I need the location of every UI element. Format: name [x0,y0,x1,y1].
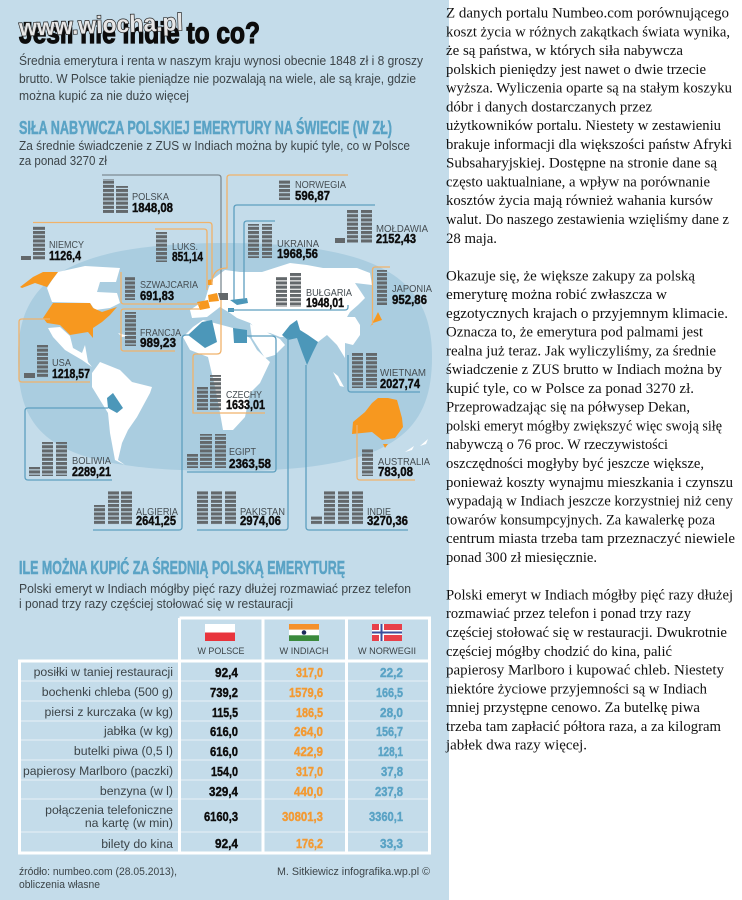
country: Mołdawia: 2152,43 [376,231,416,246]
country: Wietnam: 2027,74 [380,376,421,391]
map subheading: Za średnie świadczenie z ZUS w Indiach można by kupić tyle, co w Polsce [19,139,410,153]
country: Mołdawia: MOŁDAWIA [376,223,428,235]
paragraph 1: Z danych portalu Numbeo.com porównującego [446,6,729,22]
country: Francja [125,312,181,350]
country: Niemcy [21,226,84,263]
values: Norway: 28,0 [380,705,403,720]
paragraph 2: emeryturę można robić zwłaszcza w [446,287,667,303]
country: Luksemburg: 851,14 [172,249,204,264]
paragraph 2: Przeprowadzając się na półwysep Dekan, [446,400,690,416]
paragraph 3: jabłek dwa razy więcej. [445,738,587,754]
country: Polska: POLSKA [132,191,169,203]
paragraph 3: trzeba tam zapłacić półtora raza, a za kilogram [446,719,721,735]
country: Wietnam: WIETNAM [380,367,426,379]
country: Algieria: ALGIERIA [136,506,178,518]
paragraph 1: dóbr i danych dostarczanych przez [446,99,652,115]
values: Poland: 739,2 [210,685,238,700]
country: Egipt: 2363,58 [229,456,271,471]
country: Norwegia: 596,87 [295,188,330,203]
country: Indie: INDIE [367,506,391,518]
values: Poland: 616,0 [210,744,238,759]
row labels: papierosy Marlboro (paczki) [23,764,173,778]
intro text: brutto. W Polsce takie pieniądze nie pozwalają na wiele, ale są kraje, gdzie [19,72,416,86]
values: Poland: 6160,3 [204,809,238,824]
row labels: bochenki chleba (500 g) [42,685,173,699]
paragraph 1: walut. Do naszego zestawienia wzięliśmy dane z [446,212,729,228]
country: USA: USA [52,357,71,369]
flag: India [289,624,319,641]
country: Szwajcaria: SZWAJCARIA [140,279,198,291]
row labels: piersi z kurczaka (w kg) [45,705,173,719]
values: Norway: 33,3 [380,836,403,851]
world map [18,243,432,471]
country: Australia: AUSTRALIA [378,456,430,468]
values: Norway: 128,1 [378,744,403,759]
country: Polska: 1848,08 [132,200,173,215]
country: Japonia [377,270,432,307]
country: Japonia: 952,86 [392,292,427,307]
source note: obliczenia własne [19,879,100,891]
paragraph 1: użytkowników portalu. Niestety w zestawieniu [446,118,721,134]
paragraph 2: ponieważ koszty wynajmu mieszkania i czynszu [446,475,733,491]
country: Pakistan: 2974,06 [240,513,281,528]
paragraph 2: oszczędności mogłyby być jeszcze większe, [446,456,704,472]
row labels: benzyna (w l) [100,784,173,798]
paragraph 2: realna już teraz. Jak wyliczyliśmy, za średnie [446,343,716,359]
country: Francja: 989,23 [140,335,176,350]
values: India: 176,2 [296,836,323,851]
values: Poland: 92,4 [215,836,239,851]
comparison table [20,618,430,853]
country: Ukraina: 1968,56 [277,246,318,261]
country: Pakistan [197,491,285,528]
country: Mołdawia [335,210,428,246]
paragraph 2: świadczenie z ZUS brutto w Indiach można by [446,362,722,378]
paragraph 2: nabywczą o 76 proc. W rzeczywistości [446,437,668,453]
country: USA [24,345,90,381]
paragraph 3: częściej stołować się w restauracji. Dwukrotnie [446,625,727,641]
paragraph 2: towarów konsumpcyjnych. Za kawalerkę poza [446,512,715,528]
paragraph 1: 28 maja. [446,231,497,247]
paragraph 2: Okazuje się, że większe zakupy za polską [446,268,695,284]
country: Indie [311,491,408,528]
values: India: 422,9 [294,744,323,759]
values: Poland: 154,0 [211,764,238,779]
values: India [282,665,323,851]
flag: Poland [205,624,235,641]
country: Ukraina: UKRAINA [277,238,319,250]
country: Algieria [94,491,178,528]
paragraph 3: papierosy Marlboro i kupować chleb. Niestety [446,662,724,678]
title: Jeśli nie Indie to co? [19,17,260,50]
values: Norway: 166,5 [376,685,403,700]
watermark: www.wiocha.pl [18,9,183,42]
row labels: jabłka (w kg) [103,724,173,738]
row labels: posiłki w taniej restauracji [34,665,173,679]
paragraph 1: polskich pieniędzy jest nawet o dwie trzecie [446,62,706,78]
source note: źródło: numbeo.com (28.05.2013), [19,866,177,878]
values: India: 440,0 [294,784,323,799]
row labels: butelki piwa (0,5 l) [74,744,173,758]
map subheading [19,139,410,168]
values: Poland: 329,4 [209,784,239,799]
values: India: 317,0 [296,665,323,680]
country: Niemcy: 1126,4 [49,248,82,263]
source note [19,866,177,891]
table subheading: i ponad trzy razy częściej stołować się w restauracji [19,597,293,611]
country: Australia [362,449,430,479]
values: Poland: 115,5 [212,705,238,720]
country: Norwegia: NORWEGIA [295,179,346,191]
paragraph 2: wypadają w Indiach jeszcze korzystniej niż ceny [446,494,733,510]
intro text: Średnia emerytura i renta w naszym kraju wynosi obecnie 1848 zł i 8 groszy [19,53,424,68]
values: India: 1579,6 [289,685,323,700]
row labels [23,665,173,851]
country: Niemcy: NIEMCY [49,239,84,251]
paragraph 1: Subsaharyjskiej. Dostępne na stronie dane są [446,156,717,172]
table subheading: Polski emeryt w Indiach mógłby pięć razy dłużej rozmawiać przez telefon [19,582,411,596]
intro text [19,53,424,103]
paragraph 2: polski emeryt mógłby zwiększyć więc swoją siłę [446,418,722,434]
values: Norway: 22,2 [380,665,403,680]
country: Polska [103,179,173,215]
country: Wietnam [352,353,426,391]
paragraph 2: centrum miasta trzeba tam przeznaczyć niewiele [446,531,735,547]
column labels: W POLSCE [198,646,244,657]
values: Norway: 3360,1 [369,809,403,824]
values: Poland [204,665,239,851]
paragraph 1: brakuje informacji dla większości państw Afryki [446,137,732,153]
column labels: W NORWEGII [358,646,416,657]
country: Czechy: CZECHY [226,389,262,401]
values: India: 186,5 [296,705,323,720]
country: Japonia: JAPONIA [392,283,432,295]
country: Algieria: 2641,25 [136,513,176,528]
author credit: M. Sitkiewicz infografika.wp.pl © [277,866,430,878]
country: Egipt [187,434,271,471]
intro text: można kupić za nie dużo więcej [19,89,189,103]
paragraph 1: koszt życia w różnych zakątkach świata wynika, [446,24,730,40]
country: Indie: 3270,36 [367,513,408,528]
paragraph 3: mniej przystępne cenowo. Za butelkę piwa [446,700,700,716]
values: Norway: 237,8 [375,784,403,799]
values: Poland: 92,4 [215,665,239,680]
paragraph 2: kupić tyle, co w Polsce za ponad 3270 zł. [446,381,694,397]
country: Luksemburg [156,232,204,264]
paragraph 2: egzotycznych krajach o przyjemnym klimacie. [446,306,728,322]
values: India: 264,0 [294,724,323,739]
values: Norway: 156,7 [376,724,403,739]
country: Luksemburg: LUKS. [172,241,198,253]
table subheading [19,582,411,611]
country: Bułgaria: 1948,01 [306,295,344,310]
paragraph 1 [446,6,732,247]
country: USA: 1218,57 [52,366,90,381]
paragraph 3: Polski emeryt w Indiach mógłby pięć razy dłużej [446,588,733,604]
country: Czechy [197,375,265,412]
country: Boliwia: BOLIWIA [72,455,111,467]
values: India: 30801,3 [282,809,323,824]
paragraph 1: że są państwa, w których siła nabywcza [446,43,683,59]
country: Bułgaria [276,273,352,310]
country: Czechy: 1633,01 [226,397,265,412]
article text column [445,6,735,754]
paragraph 1: kosztów życia mają również wahania kursów [446,193,713,209]
values: Norway: 37,8 [381,764,403,779]
country: Bułgaria: BUŁGARIA [306,287,352,299]
connector lines [19,175,420,530]
country: Pakistan: PAKISTAN [240,506,285,518]
row labels: na kartę (w min) [85,816,173,830]
row labels: połączenia telefoniczne [45,803,173,817]
paragraph 3: niektóre życiowe przyjemności są w Indiach [446,681,707,697]
country: Ukraina [248,224,319,261]
map subheading: za ponad 3270 zł [19,154,107,168]
paragraph 3: częściej mógłby chodzić do kina, palić [446,644,672,660]
row labels: bilety do kina [101,837,173,851]
paragraph 3: rozmawiać przez telefon i ponad trzy razy [446,606,691,622]
country: Egipt: EGIPT [229,446,256,458]
column labels [198,646,416,657]
paragraph 2: ponad 300 zł miesięcznie. [446,550,597,566]
country: Boliwia [29,442,111,479]
flag: Norway [372,624,402,641]
country: Francja: FRANCJA [140,327,181,339]
paragraph 2: Oznacza to, że emerytura pod palmami jest [446,325,704,341]
country: Szwajcaria: 691,83 [140,288,174,303]
paragraph 1: wyższa. Wyliczenia oparte są na stałym koszyku [446,81,732,97]
paragraph 1: często uaktualniane, a wpływ na porównanie [446,174,710,190]
country: Australia: 783,08 [378,464,413,479]
column labels: W INDIACH [280,646,329,657]
values: Poland: 616,0 [210,724,238,739]
values: Norway [369,665,403,851]
country: Norwegia [279,179,346,203]
country: Szwajcaria [125,277,198,303]
paragraph 2 [446,268,735,566]
paragraph 3 [445,588,733,754]
infographic panel [0,0,449,900]
values: India: 317,0 [296,764,323,779]
country: Boliwia: 2289,21 [72,464,111,479]
